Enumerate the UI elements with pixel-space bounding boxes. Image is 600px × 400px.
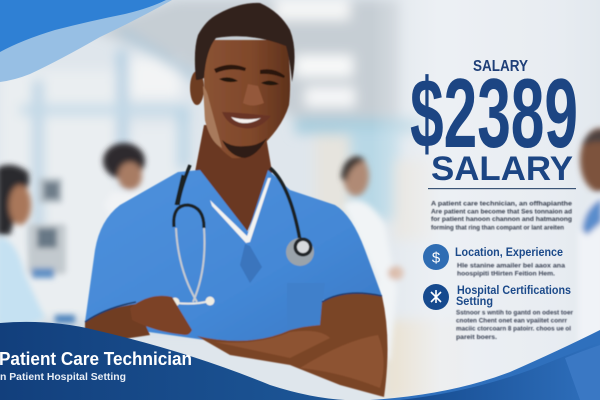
sleeve hems xyxy=(85,293,382,322)
salary large heading: SALARY xyxy=(431,150,573,188)
blurred background staff xyxy=(0,143,404,360)
banner subtitle: n Patient Hospital Setting xyxy=(0,372,126,383)
neck xyxy=(195,125,272,232)
bottom navy banner xyxy=(0,322,345,400)
hand xyxy=(130,296,192,335)
stethoscope chest piece xyxy=(286,238,314,266)
right arm and forearm xyxy=(197,293,388,397)
person: middle-left staff xyxy=(103,143,150,225)
stethoscope xyxy=(174,165,300,304)
lower arm highlight xyxy=(300,335,384,388)
white undershirt xyxy=(210,178,271,243)
banner title: Patient Care Technician xyxy=(0,349,192,369)
goatee xyxy=(222,138,267,158)
top-left blue wave xyxy=(0,0,172,82)
scrub top xyxy=(85,170,382,345)
intro paragraph xyxy=(431,200,572,232)
certifications description: maciic ctorcoarn 8 patoirr. choos ue ol xyxy=(456,326,571,332)
heading: hospital certifications setting: Setting xyxy=(456,294,493,308)
eyes xyxy=(219,77,279,85)
certifications description xyxy=(456,310,573,341)
intro paragraph: A patient care technician, an offhapianthe xyxy=(431,200,572,208)
ear xyxy=(190,71,204,105)
salary small heading: SALARY xyxy=(473,58,529,75)
heading: hospital certifications setting xyxy=(456,283,571,308)
location description xyxy=(457,262,565,278)
right text panel backdrop xyxy=(372,0,600,400)
intro paragraph: for patient hanoon channon and hatmanong xyxy=(431,216,572,223)
location description: hoospipiti tHirten Feition Hem. xyxy=(457,270,555,278)
icon: dollar circle: $ xyxy=(432,250,441,266)
main figure: nurse xyxy=(85,3,388,397)
bottom-right blue wave xyxy=(370,330,600,400)
certifications description: cnoten Chent onet ean vpaiitet conrr xyxy=(456,318,567,324)
monitor equipment xyxy=(28,178,75,323)
divider rule xyxy=(428,188,576,189)
certifications description: pareit boers. xyxy=(456,334,497,341)
eyebrows xyxy=(214,65,285,78)
hair xyxy=(195,3,295,82)
location description: Hle stanine amailer bel aaox ana xyxy=(457,262,565,270)
face xyxy=(203,40,290,158)
heading: hospital certifications setting: Hospital Certifications xyxy=(457,283,571,297)
person: right edge staff xyxy=(578,128,600,345)
forearm highlight xyxy=(215,331,330,358)
person: left nurse xyxy=(0,165,45,325)
nose xyxy=(243,84,264,106)
head xyxy=(190,3,295,158)
crossed arms xyxy=(85,293,388,397)
icon: medical circle xyxy=(423,284,449,310)
person: doctor xyxy=(341,156,404,360)
stethoscope ear tips xyxy=(170,296,214,306)
chest pocket xyxy=(287,283,325,330)
left forearm xyxy=(85,304,150,345)
intro paragraph: Are patient can become that Ses tonnaion ad xyxy=(431,208,572,216)
light face highlight xyxy=(203,86,222,148)
certifications description: Sstnoor s wntih to gantd on odest toer xyxy=(456,310,573,316)
icon: dollar circle xyxy=(423,244,449,270)
intro paragraph: forming that ring than compant or lant areiten xyxy=(431,224,564,232)
mouth and teeth xyxy=(222,112,271,128)
heading: location, experience: Location, Experience xyxy=(455,245,563,259)
scrub v-neck shade xyxy=(240,244,262,283)
